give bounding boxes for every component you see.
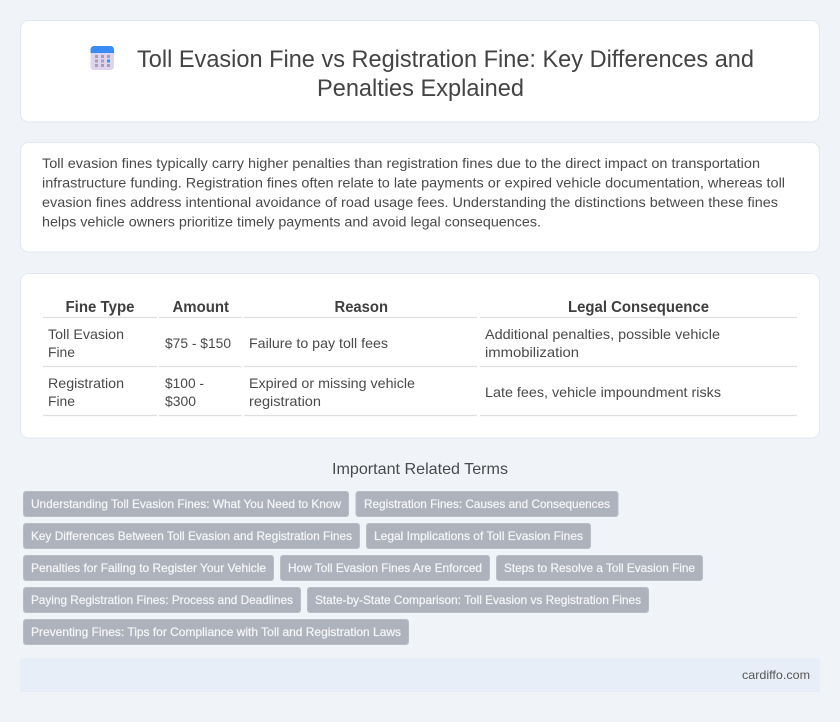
table row: toll evasion fine: Toll Evasion [48, 326, 124, 342]
table row: toll evasion fine: Additional penalties, possible vehicle [485, 326, 720, 342]
tag: Preventing Fines: Tips for Compliance with Toll and Registration Laws [31, 625, 401, 639]
table row: registration fine: Fine [48, 393, 75, 409]
tag [366, 524, 590, 548]
tag [24, 620, 408, 644]
table header: Legal Consequence [568, 299, 709, 316]
footer bar [20, 658, 820, 692]
title [137, 46, 754, 102]
table row: toll evasion fine [48, 326, 720, 360]
tag [24, 492, 348, 516]
icon: calendar [90, 46, 114, 70]
tag [356, 492, 618, 516]
table row: registration fine: $300 [165, 393, 196, 409]
table header [66, 299, 709, 316]
related term tags [24, 492, 702, 644]
table row: toll evasion fine: immobilization [485, 344, 579, 360]
heading: related terms: Important Related Terms [332, 461, 508, 478]
tag: Penalties for Failing to Register Your Vehicle [31, 561, 266, 575]
tag: Steps to Resolve a Toll Evasion Fine [504, 561, 695, 575]
tag: Understanding Toll Evasion Fines: What You Need to Know [31, 497, 341, 511]
table row: registration fine: Expired or missing vehicle [249, 375, 415, 391]
tag [308, 588, 648, 612]
tag [24, 524, 360, 548]
tag [280, 556, 490, 580]
table row: registration fine: $100 - [165, 375, 204, 391]
tag: Registration Fines: Causes and Consequences [364, 497, 610, 511]
table row: toll evasion fine: $75 - $150 [165, 335, 231, 351]
tag: Key Differences Between Toll Evasion and Registration Fines [31, 529, 352, 543]
panel: summary text: infrastructure funding. Registration fines often relate to late payments or expired vehicle documentation, whereas toll [42, 174, 785, 190]
tag: State-by-State Comparison: Toll Evasion vs Registration Fines [315, 593, 641, 607]
tag: How Toll Evasion Fines Are Enforced [288, 561, 482, 575]
tag [496, 556, 702, 580]
tag: Legal Implications of Toll Evasion Fines [374, 529, 583, 543]
tag [24, 556, 274, 580]
table row: toll evasion fine: Fine [48, 344, 75, 360]
footer bar: cardiffo.com [742, 668, 810, 682]
panel: comparison table [20, 274, 820, 438]
panel: summary text [20, 142, 820, 252]
panel: summary text: Toll evasion fines typically carry higher penalties than registration fines due to the direct impact on transportation [42, 155, 760, 171]
tag: Paying Registration Fines: Process and Deadlines [31, 593, 293, 607]
table row: registration fine: Late fees, vehicle impoundment risks [485, 384, 721, 400]
panel: summary text: evasion fines address intentional avoidance of road usage fees. Understanding the distinctions between these fines [42, 194, 778, 210]
panel: summary text: helps vehicle owners prioritize timely payments and avoid legal consequences. [42, 214, 541, 230]
title: Toll Evasion Fine vs Registration Fine: Key Differences and [137, 46, 754, 73]
table row: registration fine: registration [249, 393, 321, 409]
table row: toll evasion fine: Failure to pay toll fees [249, 335, 388, 351]
table header: Reason [334, 299, 388, 316]
panel: header [20, 20, 820, 122]
table row: registration fine [48, 375, 721, 409]
title: Penalties Explained [317, 75, 524, 102]
table header: Fine Type [66, 299, 135, 316]
table header: Amount [172, 299, 230, 316]
table row: registration fine: Registration [48, 375, 124, 391]
tag [24, 588, 300, 612]
